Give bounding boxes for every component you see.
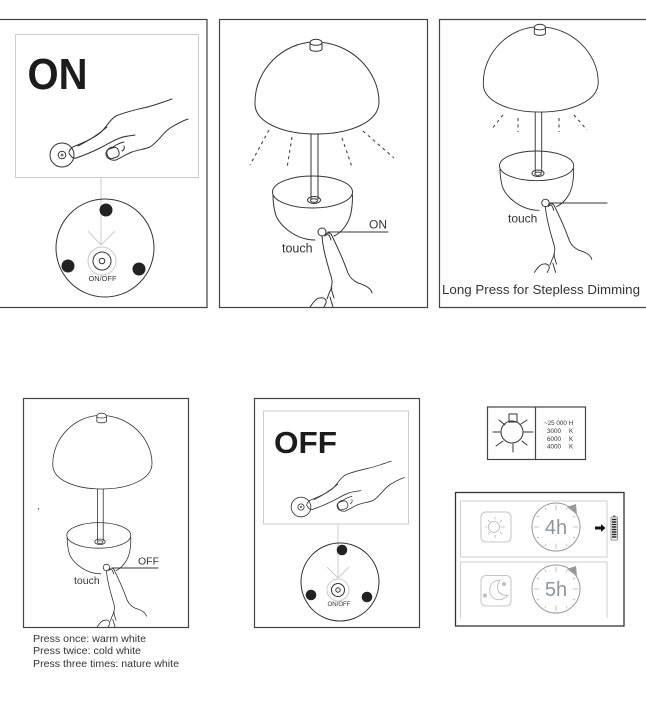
callout line: OFF	[112, 567, 158, 569]
text block: press instructions: Press once: warm white	[33, 633, 146, 645]
label: touch: touch	[74, 575, 100, 587]
light rays	[250, 130, 394, 168]
text: specifications: K	[569, 428, 574, 435]
icon: lamp underside	[56, 199, 154, 297]
light rays	[491, 115, 587, 132]
icon: lamp underside: ON/OFF	[88, 276, 116, 283]
text block: press instructions	[33, 633, 179, 670]
icon: sun	[481, 512, 511, 542]
icon: battery	[611, 516, 618, 540]
icon: clock 4h: 4h	[545, 517, 567, 539]
label: touch: touch	[508, 212, 537, 226]
illustration: lamp with finger	[53, 413, 152, 627]
icon: moon	[481, 576, 511, 606]
arrow: to underside button	[327, 524, 349, 578]
row: daylight 4h	[460, 501, 607, 557]
arrow: to underside button	[88, 177, 115, 245]
label: ON: ON	[369, 218, 387, 232]
arrow: to battery	[595, 524, 606, 532]
text block: press instructions: Press twice: cold white	[33, 645, 141, 657]
heading: OFF: OFF	[274, 425, 337, 460]
callout line	[550, 202, 607, 204]
panel: specification box	[488, 407, 586, 460]
illustration: lamp with finger	[483, 24, 598, 272]
inset: OFF hand press	[264, 411, 408, 524]
inset: ON hand press	[16, 34, 198, 178]
icon: clock 4h	[532, 503, 580, 551]
text: specifications: K	[569, 444, 574, 450]
text: specifications: 4000	[547, 444, 562, 450]
panel: ON instruction	[0, 20, 207, 308]
panel: OFF instruction	[254, 398, 420, 628]
illustration: lamp with finger	[255, 39, 379, 307]
icon: clock 5h: 5h	[545, 579, 567, 601]
icon: clock 5h	[532, 565, 580, 613]
row: night 5h	[460, 562, 607, 618]
icon: finger pressing button	[50, 99, 188, 167]
text block: press instructions: Press three times: nature white	[33, 658, 179, 670]
callout line: ON	[328, 231, 388, 233]
label: OFF: OFF	[138, 556, 159, 568]
text: specifications: 6000	[547, 436, 562, 443]
icon: finger pressing button	[291, 461, 404, 517]
caption: long press: Long Press for Stepless Dimming	[442, 282, 640, 297]
icon: lamp underside	[301, 543, 379, 621]
text: specifications: 3000	[547, 428, 562, 435]
label: touch: touch	[282, 242, 313, 256]
panel: lamp turned on	[220, 20, 428, 308]
text: specifications	[544, 420, 574, 450]
panel: runtime	[456, 492, 624, 626]
panel: stepless dimming	[440, 20, 646, 308]
icon: lamp underside: ON/OFF	[328, 602, 351, 608]
text: specifications: ~25 000 H	[544, 420, 574, 427]
panel: colour temperature touch	[24, 398, 188, 628]
text: specifications: K	[569, 436, 574, 443]
icon: bulb sun	[493, 414, 533, 452]
heading: ON: ON	[28, 50, 88, 99]
